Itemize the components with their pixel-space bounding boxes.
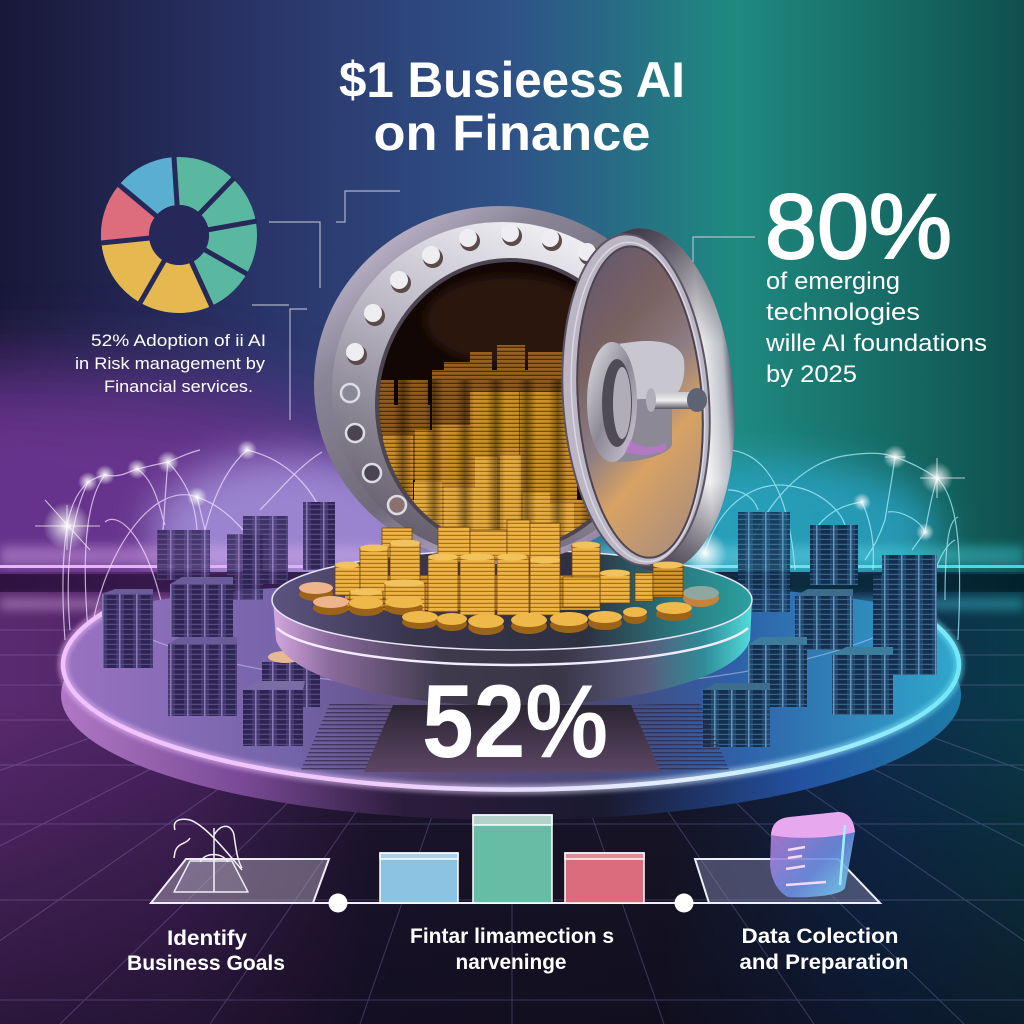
vault door xyxy=(552,223,746,577)
icon: data cube xyxy=(770,812,855,897)
timeline dots xyxy=(328,894,694,912)
left caption: in Risk management by xyxy=(75,354,266,373)
stat description: wille AI foundations xyxy=(765,330,987,357)
step labels xyxy=(127,925,908,975)
stat description: of emerging xyxy=(766,268,900,295)
vault platform xyxy=(272,550,752,706)
door face xyxy=(552,229,720,571)
left caption: Financial services. xyxy=(104,377,253,396)
ring studs xyxy=(341,224,599,514)
label: step 2: Fintar limamection s xyxy=(410,925,614,948)
left caption: 52% Adoption of ii AI xyxy=(91,331,266,350)
label: step 3 xyxy=(740,925,908,974)
stat description xyxy=(765,268,987,388)
stat 80%: 80% xyxy=(765,176,952,278)
step 3 panel and icon xyxy=(695,812,880,903)
label: step 1: Business Goals xyxy=(127,952,285,975)
right data towers xyxy=(703,512,937,747)
big number 52%: 52% xyxy=(422,664,608,780)
step 1 panel and icon xyxy=(151,819,329,903)
disc surface xyxy=(63,581,959,790)
title line 2: on Finance xyxy=(374,105,650,161)
right statistic xyxy=(765,176,987,388)
timeline line xyxy=(150,902,880,904)
connector lines xyxy=(252,191,755,420)
large glowing disc xyxy=(61,570,961,820)
door handle xyxy=(646,388,707,412)
label: step 1 xyxy=(127,927,285,975)
door hub xyxy=(587,341,684,462)
coins inside the vault xyxy=(379,345,590,538)
beam behind big number xyxy=(300,703,730,772)
left data towers xyxy=(102,502,335,746)
vault interior xyxy=(375,258,645,552)
stat description: technologies xyxy=(766,299,920,326)
label: step 3: Data Colection xyxy=(742,925,898,948)
disc rim xyxy=(61,570,961,820)
network arcs left xyxy=(63,450,322,640)
label: step 3: and Preparation xyxy=(740,951,908,974)
loose coins xyxy=(299,582,719,635)
vault ring xyxy=(314,206,686,564)
network arcs right xyxy=(705,450,960,640)
label: step 2: narveninge xyxy=(456,951,566,974)
sparkles xyxy=(35,440,965,575)
coins in front of the vault xyxy=(299,540,719,635)
bar chart xyxy=(380,815,644,903)
neon rim xyxy=(63,613,959,790)
door edge xyxy=(554,223,746,577)
coins behind the door edge xyxy=(382,520,560,563)
donut chart xyxy=(101,157,257,311)
stat description: by 2025 xyxy=(766,361,857,388)
title xyxy=(339,52,685,161)
label: step 2 xyxy=(410,925,614,974)
title line 1: $1 Busieess AI xyxy=(339,52,685,108)
left caption xyxy=(75,331,266,396)
label: step 1: Identify xyxy=(167,927,247,950)
